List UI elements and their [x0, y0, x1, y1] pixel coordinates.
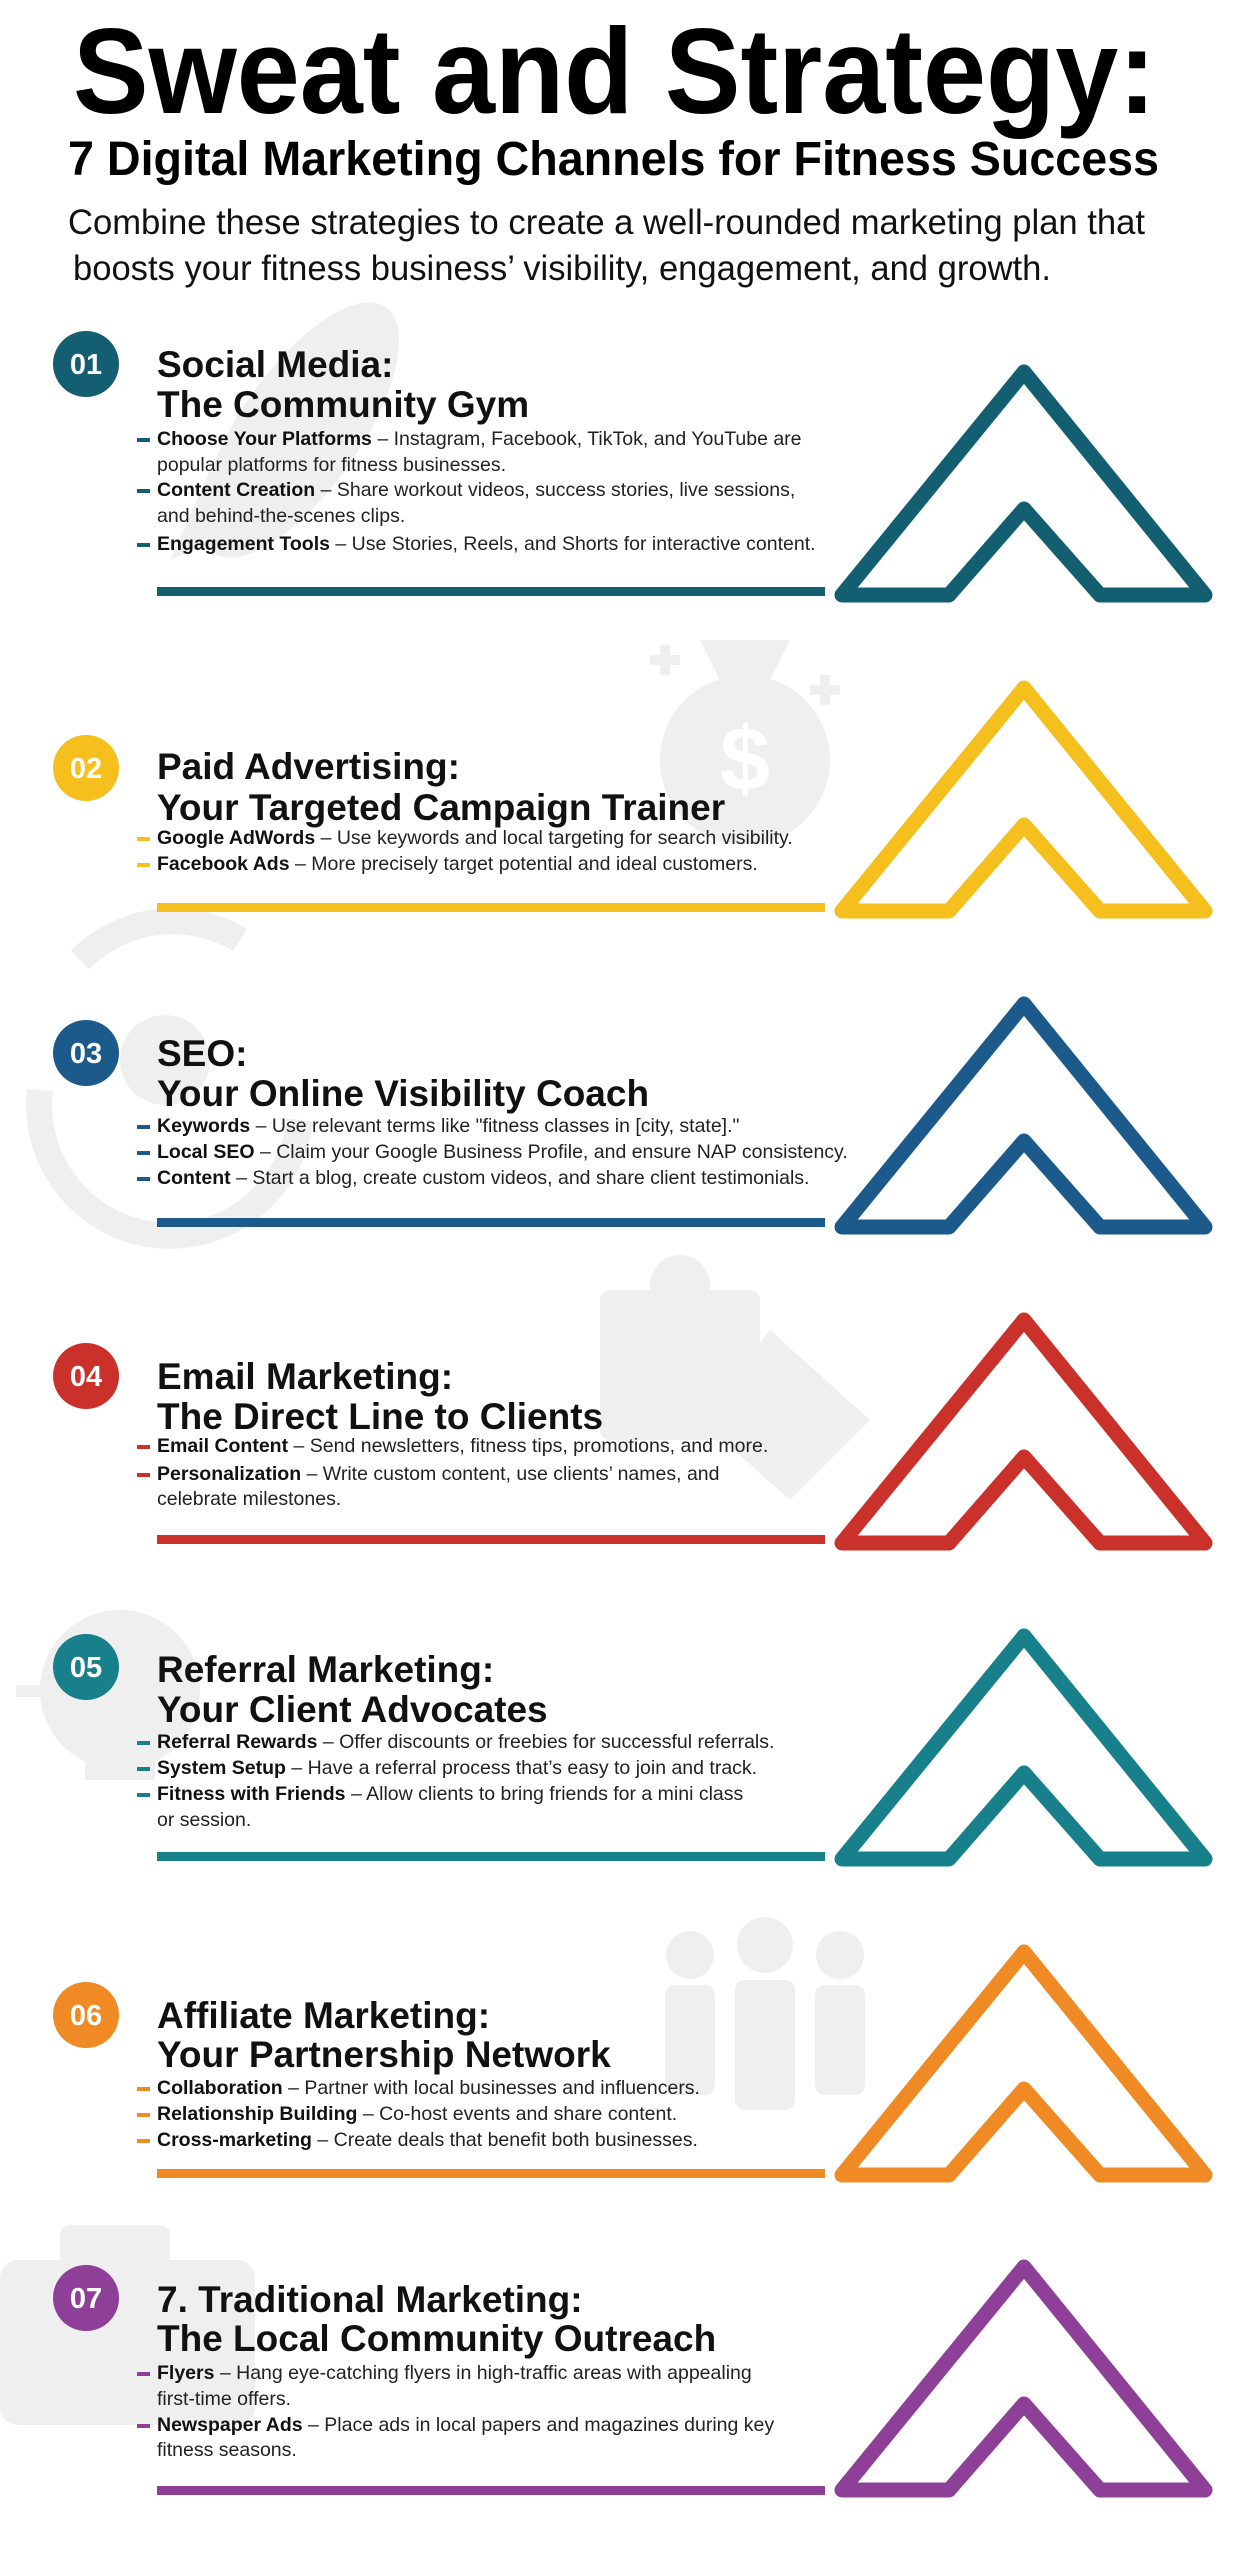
number badge 02	[53, 735, 119, 801]
background icon: briefcase	[0, 2225, 255, 2425]
bullets 06: Relationship Building – Co-host events and share content.	[157, 2103, 677, 2125]
bullets 01: Content Creation – Share workout videos, success stories, live sessions,	[157, 479, 795, 501]
heading 03	[157, 1033, 649, 1114]
bar 05	[157, 1852, 825, 1861]
bar 01	[157, 587, 825, 596]
bullets 01: Engagement Tools – Use Stories, Reels, and Shorts for interactive content.	[157, 533, 816, 555]
heading 02: Your Targeted Campaign Trainer	[157, 787, 725, 828]
arrow 03	[842, 1004, 1205, 1227]
bullets 02: Google AdWords – Use keywords and local targeting for search visibility.	[157, 827, 793, 849]
heading 04: The Direct Line to Clients	[157, 1396, 603, 1437]
bullets 05: Fitness with Friends – Allow clients to bring friends for a mini class	[157, 1783, 744, 1805]
bullets 07: first-time offers.	[157, 2388, 291, 2410]
number badge 06	[53, 1982, 119, 2048]
heading 03: Your Online Visibility Coach	[157, 1073, 649, 1114]
section 04: email marketing	[53, 1320, 1205, 1544]
background icon: lightbulb	[16, 1610, 200, 1780]
arrow 05	[842, 1636, 1205, 1859]
bullets 01	[137, 428, 816, 555]
section 06: affiliate marketing	[53, 1952, 1205, 2178]
title: Sweat and Strategy:	[73, 3, 1156, 139]
heading 01	[157, 344, 529, 425]
section 03: seo	[53, 1004, 1205, 1227]
bullets 04: Email Content – Send newsletters, fitness tips, promotions, and more.	[157, 1435, 768, 1457]
number badge 03: 03	[70, 1038, 102, 1070]
background icon: people	[665, 1917, 865, 2110]
heading 06: Your Partnership Network	[157, 2034, 611, 2075]
bullets 07: fitness seasons.	[157, 2439, 297, 2461]
bar 02	[157, 903, 825, 912]
heading 03: SEO:	[157, 1033, 247, 1074]
background icon: rocket	[165, 273, 435, 587]
heading 02: Paid Advertising:	[157, 746, 460, 787]
bullets 04: celebrate milestones.	[157, 1488, 341, 1510]
bullets 05: or session.	[157, 1809, 251, 1831]
bar 04	[157, 1535, 825, 1544]
number badge 01: 01	[70, 349, 102, 381]
heading 01: The Community Gym	[157, 384, 529, 425]
heading 06: Affiliate Marketing:	[157, 1995, 490, 2036]
heading 05: Referral Marketing:	[157, 1649, 494, 1690]
heading 07	[157, 2279, 716, 2359]
number badge 01	[53, 331, 119, 397]
intro text	[68, 203, 1145, 288]
bullets 04: Personalization – Write custom content, use clients’ names, and	[157, 1463, 720, 1485]
arrow 07	[842, 2267, 1205, 2490]
bullets 01: and behind-the-scenes clips.	[157, 505, 405, 527]
bullets 06	[137, 2077, 700, 2151]
bullets 05: System Setup – Have a referral process that’s easy to join and track.	[157, 1757, 757, 1779]
bullets 03: Local SEO – Claim your Google Business Profile, and ensure NAP consistency.	[157, 1141, 848, 1163]
number badge 05: 05	[70, 1652, 102, 1684]
intro text: Combine these strategies to create a well-rounded marketing plan that	[68, 203, 1145, 242]
bullets 01: popular platforms for fitness businesses.	[157, 454, 506, 476]
background icon: puzzle	[600, 1255, 870, 1500]
number badge 07	[53, 2265, 119, 2331]
arrow 06	[842, 1952, 1205, 2175]
arrow 01	[842, 372, 1205, 595]
number badge 03	[53, 1020, 119, 1086]
bullets 07: Newspaper Ads – Place ads in local papers and magazines during key	[157, 2414, 774, 2436]
number badge 05	[53, 1634, 119, 1700]
bullets 07: Flyers – Hang eye-catching flyers in high-traffic areas with appealing	[157, 2362, 752, 2384]
bullets 05	[137, 1731, 774, 1831]
section 02: paid advertising	[53, 688, 1205, 912]
heading 07: 7. Traditional Marketing:	[157, 2279, 583, 2320]
bullets 04	[137, 1435, 768, 1510]
heading 06	[157, 1995, 611, 2075]
number badge 04: 04	[70, 1361, 102, 1393]
bullets 01: Choose Your Platforms – Instagram, Facebook, TikTok, and YouTube are	[157, 428, 802, 450]
background icon: money bag	[650, 640, 840, 845]
bullets 05: Referral Rewards – Offer discounts or freebies for successful referrals.	[157, 1731, 774, 1753]
bullets 03: Content – Start a blog, create custom videos, and share client testimonials.	[157, 1167, 809, 1189]
bullets 02	[137, 827, 793, 875]
number badge 02: 02	[70, 753, 102, 785]
heading 04	[157, 1356, 603, 1437]
heading 05: Your Client Advocates	[157, 1689, 548, 1730]
background icon: money bag: $	[720, 710, 770, 810]
arrow 04	[842, 1320, 1205, 1543]
subtitle: 7 Digital Marketing Channels for Fitness Success	[68, 133, 1159, 186]
bullets 06: Cross-marketing – Create deals that benefit both businesses.	[157, 2129, 698, 2151]
bar 03	[157, 1218, 825, 1227]
heading 04: Email Marketing:	[157, 1356, 453, 1397]
arrow 02	[842, 688, 1205, 911]
number badge 04	[53, 1343, 119, 1409]
number badge 06: 06	[70, 2000, 102, 2032]
intro text: boosts your fitness business’ visibility, engagement, and growth.	[73, 249, 1051, 288]
bullets 06: Collaboration – Partner with local businesses and influencers.	[157, 2077, 700, 2099]
background icon: gear refresh	[39, 921, 300, 1236]
heading 07: The Local Community Outreach	[157, 2318, 716, 2359]
bullets 03	[137, 1115, 848, 1189]
bullets 02: Facebook Ads – More precisely target potential and ideal customers.	[157, 853, 758, 875]
heading 05	[157, 1649, 548, 1730]
bullets 07	[137, 2362, 774, 2461]
bullets 03: Keywords – Use relevant terms like "fitness classes in [city, state]."	[157, 1115, 740, 1137]
section 05: referral marketing	[53, 1634, 1205, 1861]
section 01: social media	[53, 331, 1205, 596]
section 07: traditional marketing	[53, 2265, 1205, 2495]
bar 06	[157, 2169, 825, 2178]
heading 02	[157, 746, 725, 828]
heading 01: Social Media:	[157, 344, 393, 385]
number badge 07: 07	[70, 2283, 102, 2315]
bar 07	[157, 2486, 825, 2495]
